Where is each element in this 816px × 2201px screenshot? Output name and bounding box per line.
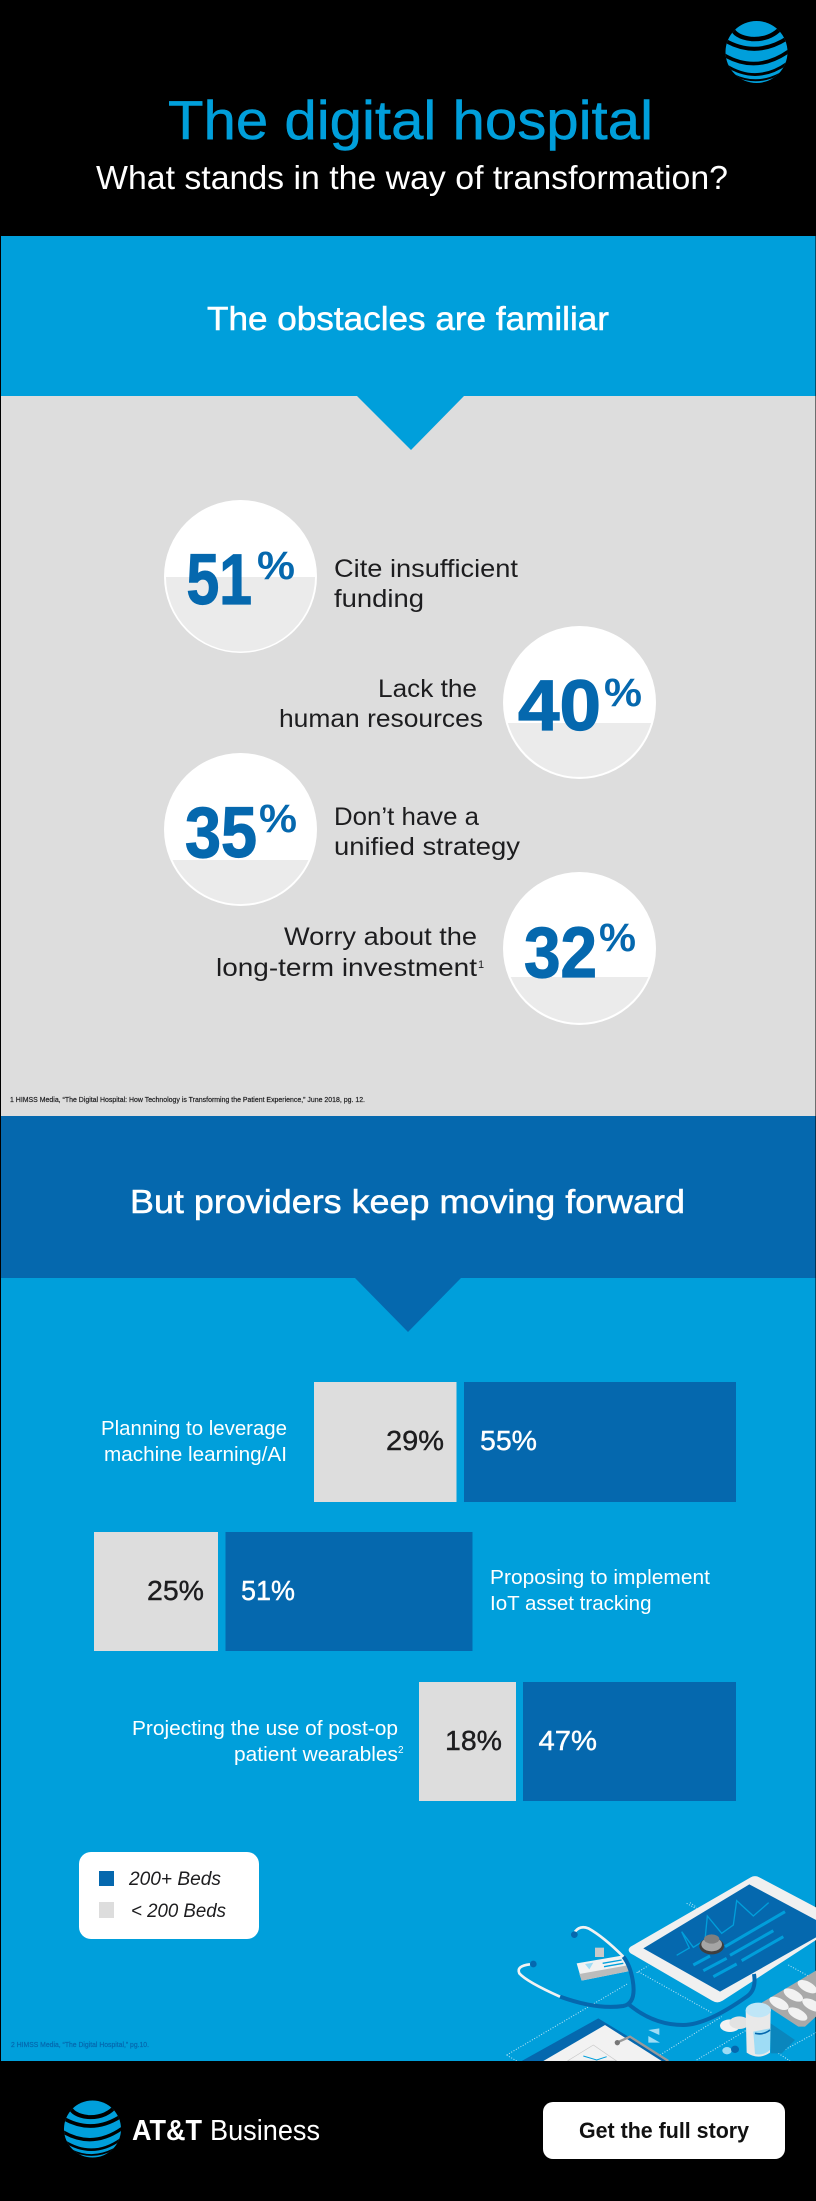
button: get the full story: Get the full story	[579, 2118, 750, 2143]
stat: 40 percent: Lack the	[378, 675, 477, 703]
bar row: patient wearables: 47%	[538, 1725, 597, 1756]
stat: 51 percent: 51	[186, 541, 252, 620]
icon: AT&T globe	[61, 2100, 124, 2158]
stat: 32 percent: 1	[478, 959, 484, 971]
bar row: IoT asset tracking: IoT asset tracking	[490, 1592, 652, 1615]
stethoscope	[519, 1927, 755, 2025]
logo wordmark: Business	[210, 2115, 320, 2147]
footer	[64, 2100, 785, 2159]
bar row: machine learning: machine learning/AI	[104, 1443, 287, 1466]
header	[96, 21, 788, 196]
bar row: IoT asset tracking	[94, 1532, 710, 1651]
pill blister pack	[762, 1971, 816, 2027]
logo wordmark: AT&T	[132, 2115, 202, 2147]
stat: 40 percent: human resources	[279, 705, 483, 733]
icon: AT&T globe	[722, 21, 790, 83]
stat: 32 percent: long-term investment	[216, 954, 477, 982]
legend: < 200 Beds	[131, 1901, 226, 1922]
stat: 51 percent	[164, 500, 518, 653]
arrow: pointer down	[355, 1278, 461, 1332]
illustration: medical devices	[507, 1876, 816, 2061]
bar row: patient wearables	[132, 1682, 736, 1801]
bar row: IoT asset tracking: 51%	[241, 1575, 295, 1606]
stat: 32 percent: 32	[524, 914, 597, 993]
legend: 200+ Beds	[128, 1869, 221, 1890]
light triangles	[648, 2028, 659, 2035]
heading: but providers keep moving forward: But providers keep moving forward	[130, 1183, 685, 1220]
stat: 51 percent: %	[257, 544, 295, 588]
loose pills	[720, 2016, 749, 2054]
bar row: machine learning: 55%	[480, 1425, 537, 1456]
heading band	[1, 1116, 816, 1278]
stat: 35 percent: Don’t have a	[334, 803, 479, 831]
stat: 40 percent: %	[604, 671, 642, 715]
bar row: IoT asset tracking: Proposing to implement	[490, 1566, 710, 1589]
stat: 40 percent: 40	[518, 667, 601, 746]
bar row: machine learning: 29%	[386, 1425, 444, 1456]
button: get the full story	[543, 2102, 785, 2159]
subtitle: What stands in the way of transformation?	[96, 159, 728, 196]
bar row: machine learning	[101, 1382, 736, 1502]
stat: 32 percent	[216, 872, 656, 1025]
ID badge	[577, 1948, 632, 1981]
pill bottle	[746, 2003, 795, 2057]
heading: the obstacles are familiar: The obstacles are familiar	[207, 300, 609, 337]
footnote 1: 1 HIMSS Media, “The Digital Hospital: How Technology is Transforming the Patient Experience,” June 2018, pg. 12.	[10, 1095, 365, 1104]
bar row: patient wearables: patient wearables	[234, 1743, 398, 1766]
bar row: patient wearables: 2	[398, 1745, 404, 1756]
bar row: machine learning: Planning to leverage	[101, 1417, 287, 1440]
dotted grid lines	[507, 1903, 816, 2061]
bar row: IoT asset tracking: 25%	[147, 1575, 204, 1606]
tablet	[629, 1876, 816, 2002]
stat: 35 percent	[164, 753, 521, 906]
footnote 2: 2 HIMSS Media, “The Digital Hospital,” pg.10.	[11, 2040, 149, 2049]
clipboard	[522, 2018, 668, 2061]
stat: 51 percent: Cite insufficient	[334, 555, 518, 583]
stat: 40 percent	[279, 626, 656, 779]
stat: 32 percent: Worry about the	[284, 923, 477, 951]
legend	[79, 1852, 259, 1939]
arrow: pointer down	[357, 396, 464, 450]
stat: 51 percent: funding	[334, 585, 424, 613]
panel: providers section	[1, 1116, 816, 2061]
stat: 32 percent: %	[599, 916, 636, 960]
title: The digital hospital	[168, 89, 653, 151]
stat: 35 percent: 35	[185, 794, 257, 873]
logo wordmark	[132, 2115, 320, 2147]
stat: 35 percent: %	[259, 797, 297, 841]
bar row: patient wearables: Projecting the use of post-op	[132, 1717, 398, 1740]
bar row: patient wearables: 18%	[445, 1725, 502, 1756]
panel: obstacles heading band	[1, 236, 816, 396]
stat: 35 percent: unified strategy	[334, 833, 521, 861]
panel: obstacles	[1, 396, 816, 1116]
